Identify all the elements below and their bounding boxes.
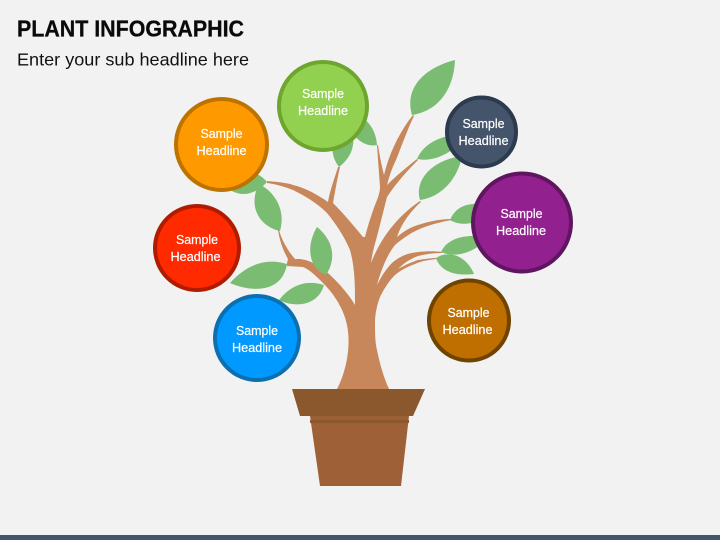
flower pot — [292, 389, 425, 486]
leaves — [230, 60, 480, 304]
title: PLANT INFOGRAPHIC — [17, 16, 244, 42]
circle: orange — [176, 99, 267, 190]
circle: navy: Sample — [462, 117, 505, 131]
circle: navy — [447, 98, 516, 166]
circle: blue: Sample — [236, 324, 278, 338]
pot band — [310, 420, 409, 423]
circle: brown: Sample — [448, 306, 490, 320]
circle: navy: Headline — [458, 134, 509, 148]
circle: orange: Sample — [200, 127, 243, 141]
tree trunk and branches — [267, 115, 452, 389]
circle: green: Headline — [298, 104, 348, 118]
circle: orange: Headline — [196, 144, 247, 158]
circle: red: Headline — [170, 250, 221, 264]
circle: red — [155, 206, 239, 290]
circle: brown — [429, 280, 509, 360]
circle: blue — [215, 296, 299, 380]
circle: blue: Headline — [232, 341, 282, 355]
circle: green — [279, 62, 367, 150]
circle: purple — [473, 174, 571, 272]
pot rim — [292, 389, 425, 416]
circle: red: Sample — [176, 233, 218, 247]
circle: brown: Headline — [442, 323, 493, 337]
subtitle: Enter your sub headline here — [17, 50, 249, 70]
footer bar — [0, 535, 720, 540]
circle: purple: Sample — [500, 207, 543, 221]
circle: green: Sample — [302, 87, 344, 101]
circle: purple: Headline — [496, 224, 546, 238]
pot body — [310, 416, 409, 486]
